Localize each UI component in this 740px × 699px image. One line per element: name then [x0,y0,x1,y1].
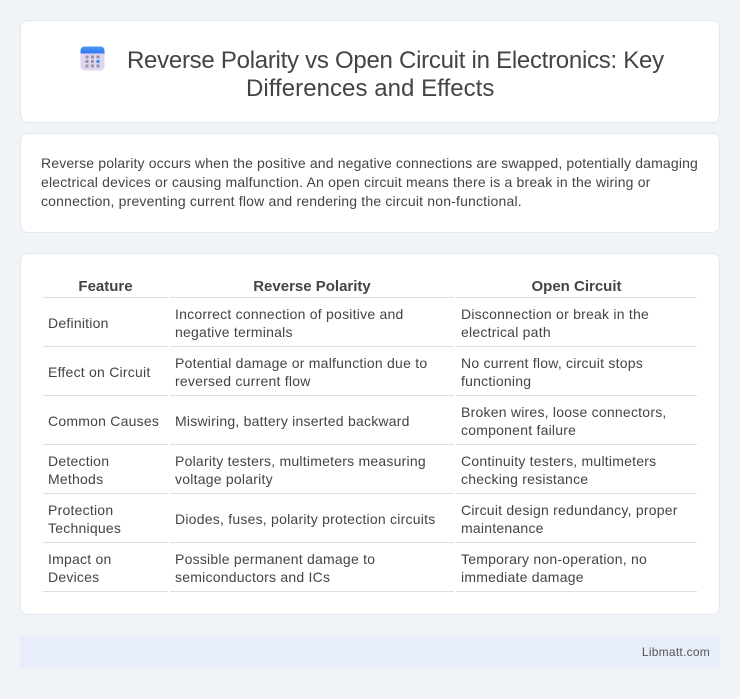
title: Differences and Effects [246,75,494,102]
intro text: electrical devices or causing malfunction. An open circuit means there is a break in the wiring or [41,174,651,190]
table header: Feature: Feature [78,278,133,295]
row: Impact on Devices: Impact on [48,551,112,567]
row: Effect on Circuit: Potential damage or malfunction due to [175,355,427,371]
row: Detection Methods: Detection [48,453,109,469]
row: Protection Techniques: Circuit design redundancy, proper [461,502,678,518]
row: Common Causes: Miswiring, battery inserted backward [175,413,410,429]
row: Detection Methods: Methods [48,471,103,487]
row: Detection Methods: Continuity testers, multimeters [461,453,656,469]
row: Protection Techniques [48,502,678,536]
row: Impact on Devices: semiconductors and ICs [175,569,330,585]
row: Definition [48,306,649,340]
table header: Reverse Polarity: Reverse Polarity [253,278,371,295]
row: Detection Methods: voltage polarity [175,471,273,487]
row: Detection Methods [48,453,656,487]
row: Effect on Circuit: No current flow, circuit stops [461,355,643,371]
icon: calendar [80,46,104,70]
table header: Open Circuit: Open Circuit [531,278,622,295]
row: Impact on Devices: immediate damage [461,569,584,585]
intro card [20,133,720,233]
row: Impact on Devices: Devices [48,569,99,585]
row: Detection Methods: Polarity testers, multimeters measuring [175,453,426,469]
intro text: Reverse polarity occurs when the positive and negative connections are swapped, potentially damaging [41,155,698,171]
row: Protection Techniques: Diodes, fuses, polarity protection circuits [175,511,435,527]
row: Effect on Circuit: reversed current flow [175,373,311,389]
row: Definition: Definition [48,315,109,331]
footer bar [20,635,720,669]
row: Common Causes: Common Causes [48,413,159,429]
intro text: connection, preventing current flow and rendering the circuit non-functional. [41,193,522,209]
row: Impact on Devices [48,551,647,585]
intro text [41,155,698,209]
title card [20,20,720,123]
row: Effect on Circuit: functioning [461,373,531,389]
footer text: Libmatt.com [642,645,710,659]
row: Protection Techniques: maintenance [461,520,544,536]
row: Protection Techniques: Techniques [48,520,121,536]
title: Reverse Polarity vs Open Circuit in Electronics: Key [127,47,664,74]
row: Detection Methods: checking resistance [461,471,588,487]
row: Protection Techniques: Protection [48,502,113,518]
row: Common Causes [48,404,667,438]
row: Common Causes: component failure [461,422,576,438]
row: Definition: Disconnection or break in the [461,306,649,322]
row: Impact on Devices: Temporary non-operation, no [461,551,647,567]
row: Definition: Incorrect connection of positive and [175,306,404,322]
row: Common Causes: Broken wires, loose connectors, [461,404,667,420]
title [127,47,664,102]
row: Impact on Devices: Possible permanent damage to [175,551,375,567]
row: Effect on Circuit: Effect on Circuit [48,364,150,380]
row: Effect on Circuit [48,355,643,389]
table card [20,253,720,615]
row: Definition: negative terminals [175,324,293,340]
row: Definition: electrical path [461,324,551,340]
